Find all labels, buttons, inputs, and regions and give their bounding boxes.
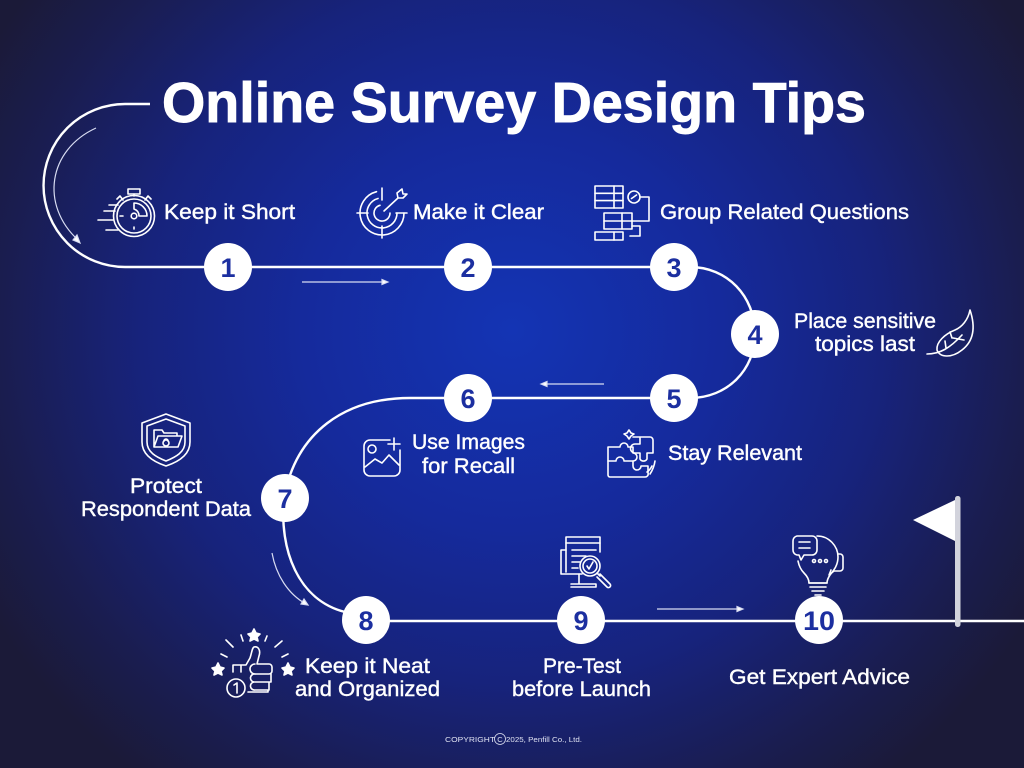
step 3 marker xyxy=(650,243,698,291)
step 8 marker: 8 xyxy=(358,606,374,636)
icon: thumbs up with stars xyxy=(212,629,294,697)
label: keep it neat and organized: and Organized xyxy=(295,678,440,701)
icon: stopwatch xyxy=(98,189,154,236)
label: place sensitive topics last: Place sensitive xyxy=(794,310,936,333)
step 10 marker xyxy=(795,596,843,644)
label: use images for recall: for Recall xyxy=(422,455,515,478)
step 7 marker xyxy=(261,474,309,522)
label: place sensitive topics last xyxy=(794,310,936,356)
step 5 marker xyxy=(650,374,698,422)
label: use images for recall: Use Images xyxy=(412,431,525,454)
label: group related questions: Group Related Questions xyxy=(660,201,909,224)
icon: lightbulb with speech bubbles xyxy=(793,536,843,595)
route line xyxy=(44,104,1024,621)
label: make it clear: Make it Clear xyxy=(413,201,544,224)
step 7 marker: 7 xyxy=(277,484,293,514)
icon: target with arrow xyxy=(357,188,407,238)
label: protect respondent data: Protect xyxy=(130,475,202,498)
arrow: direction 4 xyxy=(272,553,308,605)
copyright: 2025, Penfill Co., Ltd. xyxy=(506,735,582,744)
step 4 marker: 4 xyxy=(747,320,763,350)
arrow: direction 3 xyxy=(541,382,604,386)
step 1 marker xyxy=(204,243,252,291)
copyright: C xyxy=(497,735,503,744)
label: use images for recall xyxy=(412,431,525,478)
icon: puzzle xyxy=(608,430,655,477)
label: place sensitive topics last: topics last xyxy=(815,333,915,356)
label: pre-test before launch xyxy=(512,655,651,701)
icon: grouped data tables xyxy=(595,186,649,240)
copyright: COPYRIGHT xyxy=(445,735,495,744)
step 9 marker: 9 xyxy=(573,606,589,636)
arrow: direction 5 xyxy=(657,606,743,612)
label: stay relevant: Stay Relevant xyxy=(668,442,802,465)
icon: image xyxy=(364,438,400,476)
label: protect respondent data: Respondent Data xyxy=(81,498,251,521)
step 3 marker: 3 xyxy=(666,253,682,283)
flag xyxy=(913,496,960,627)
label: keep it neat and organized xyxy=(295,655,440,701)
step 8 marker xyxy=(342,596,390,644)
label: pre-test before launch: before Launch xyxy=(512,678,651,701)
step 2 marker xyxy=(444,243,492,291)
step 6 marker: 6 xyxy=(460,384,476,414)
label: pre-test before launch: Pre-Test xyxy=(543,655,621,678)
copyright xyxy=(445,734,582,744)
step 2 marker: 2 xyxy=(460,253,476,283)
step 6 marker xyxy=(444,374,492,422)
icon: feather xyxy=(927,310,973,356)
step 5 marker: 5 xyxy=(666,384,682,414)
title: Online Survey Design Tips xyxy=(162,71,866,135)
icon: shield with folder xyxy=(142,414,190,466)
step 4 marker xyxy=(731,310,779,358)
arrow: direction 1 xyxy=(54,128,96,243)
label: get expert advice: Get Expert Advice xyxy=(729,666,910,689)
arrow: direction 2 xyxy=(302,280,388,284)
step 10 marker: 10 xyxy=(803,606,835,636)
step 9 marker xyxy=(557,596,605,644)
step 1 marker: 1 xyxy=(220,253,236,283)
label: protect respondent data xyxy=(81,475,251,521)
icon: monitor with magnifier xyxy=(561,537,611,588)
label: keep it short: Keep it Short xyxy=(164,201,295,224)
label: keep it neat and organized: Keep it Neat xyxy=(305,655,430,678)
